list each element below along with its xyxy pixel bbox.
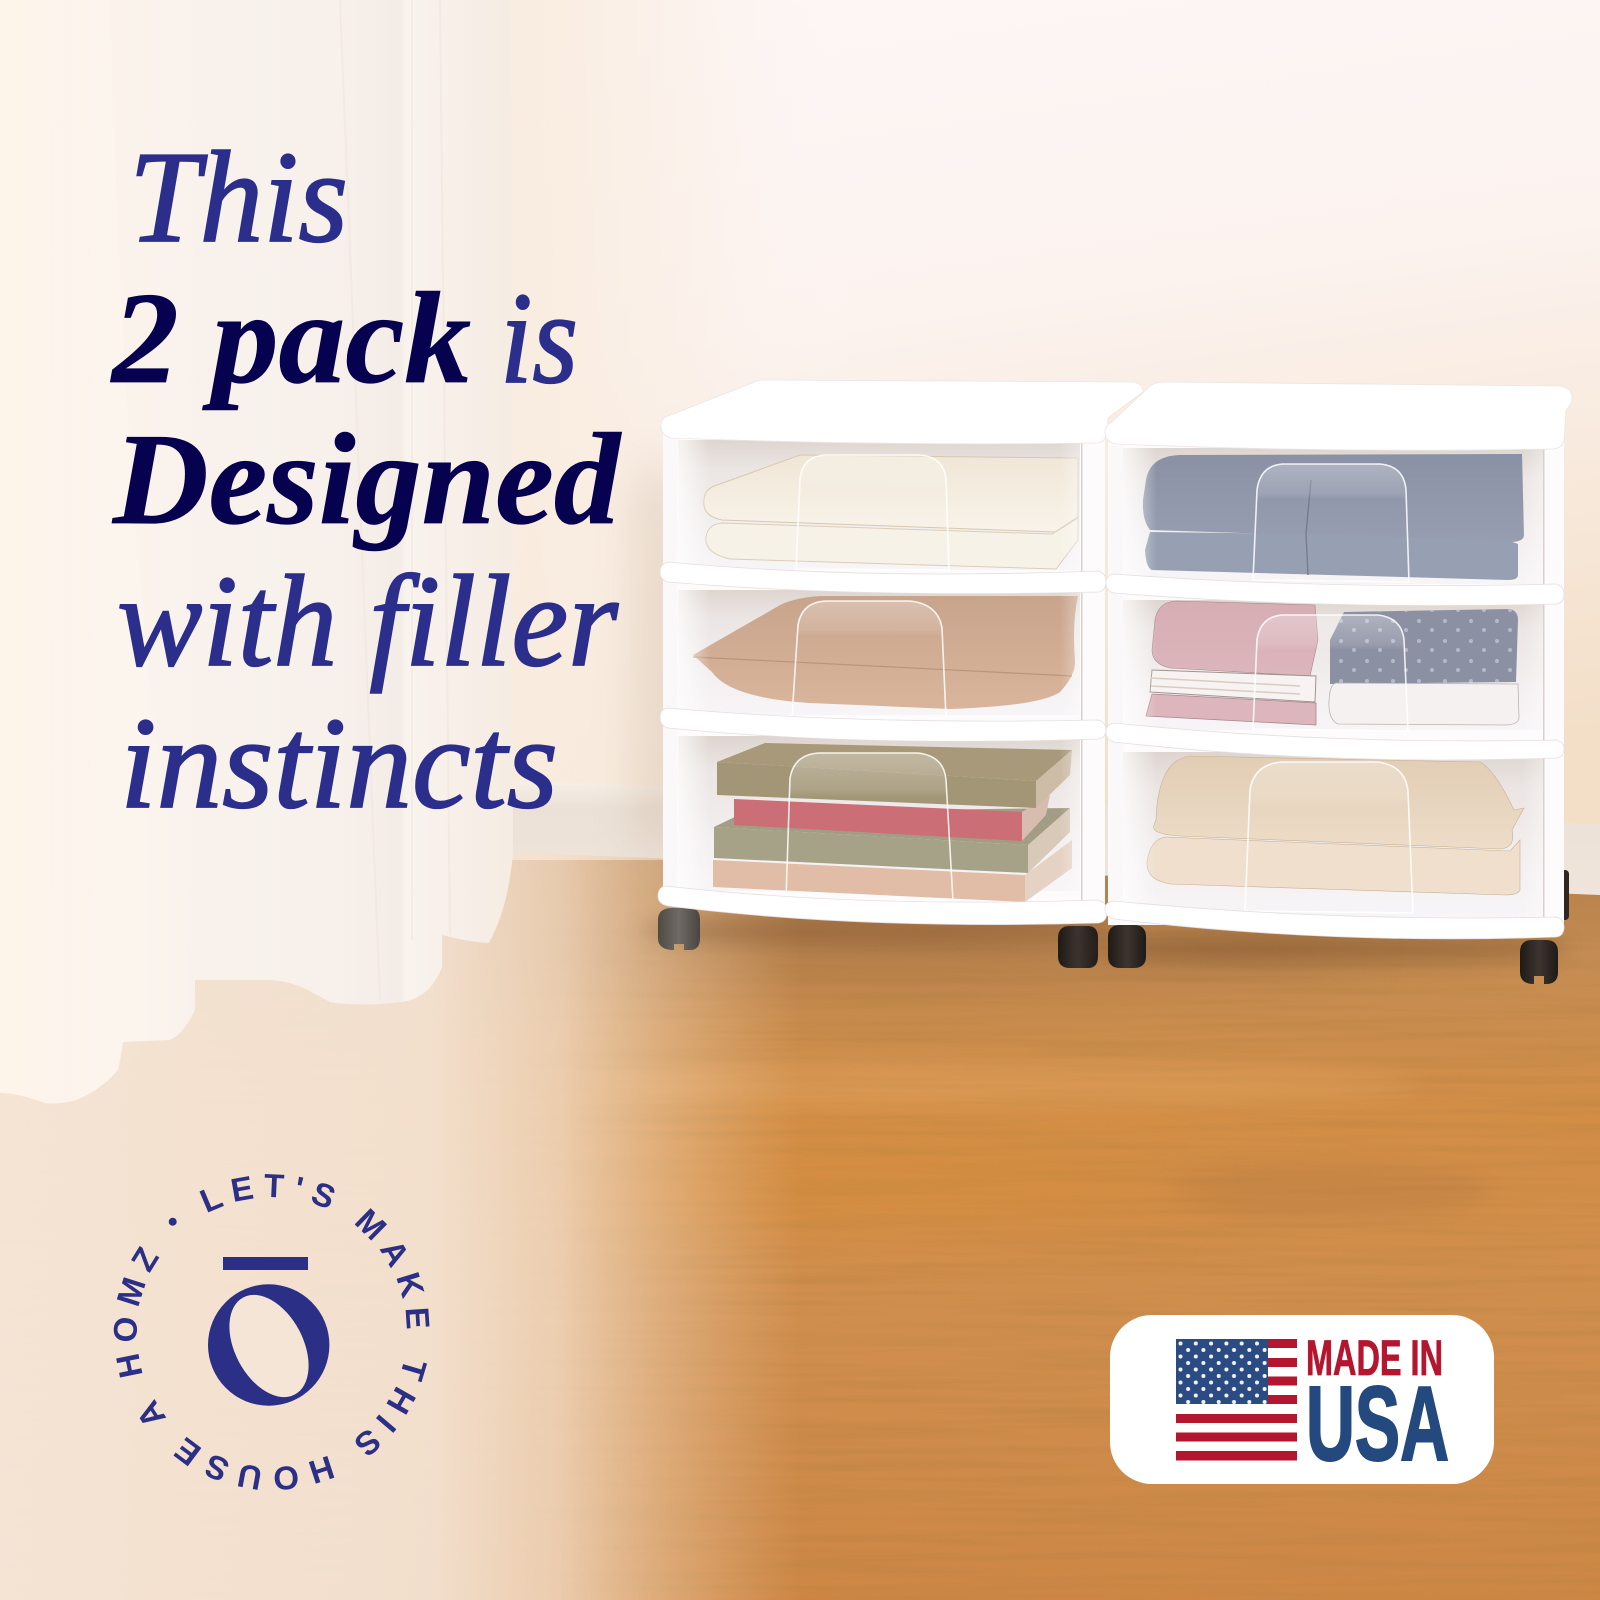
drawer 3: beige folded blankets — [1123, 752, 1543, 917]
soft shadow on wall beside cart — [640, 470, 680, 855]
circular slogan: LET'S MAKE THIS HOUSE A HOMZ — [114, 1174, 430, 1490]
cart frame — [1108, 440, 1564, 925]
pink folded fabric — [1152, 601, 1318, 676]
handle — [786, 753, 953, 901]
handle — [796, 455, 949, 570]
background: baseboard — [500, 780, 1600, 895]
caster wheels: left cart — [658, 908, 1098, 968]
rail 2 — [1106, 723, 1564, 760]
book: sage — [714, 808, 1070, 873]
handle — [1253, 464, 1409, 582]
dotted fabric — [1330, 609, 1518, 684]
drawer 2: tan pillow — [678, 590, 1080, 718]
usa text: USA — [1306, 1365, 1449, 1483]
headline line 2 regular: is — [500, 266, 578, 411]
headline line 1: This — [129, 125, 348, 270]
top panel — [1105, 382, 1572, 450]
drawer 1: blue-grey folded blankets — [1123, 448, 1543, 584]
storage cart: right — [1090, 382, 1572, 984]
top panel — [661, 380, 1143, 444]
pink base fabric — [1146, 694, 1316, 725]
rail 2 — [660, 708, 1106, 741]
background: wood floor — [0, 848, 1600, 1600]
overline bar — [223, 1257, 308, 1270]
handle — [1245, 762, 1413, 913]
badge: made in usa — [1110, 1315, 1494, 1484]
drawer 3: stacked books — [678, 736, 1080, 902]
striped folded fabric — [1150, 670, 1316, 702]
bottom rail — [1105, 901, 1564, 939]
logo: circular brand seal — [114, 1174, 430, 1490]
caster wheels: right cart — [1108, 870, 1569, 984]
cart frame — [663, 430, 1105, 905]
headline — [110, 125, 623, 836]
curtain — [0, 0, 513, 1104]
rail 1 — [1106, 574, 1564, 606]
book: peach — [713, 840, 1072, 902]
separator dot — [169, 1218, 177, 1226]
background: wall — [0, 0, 1600, 900]
side posts — [663, 438, 1105, 908]
handle — [1253, 615, 1408, 731]
handle — [792, 601, 946, 718]
drawer 1: folded cream sheets — [678, 440, 1080, 570]
rail 1 — [660, 562, 1106, 594]
side posts — [1109, 446, 1563, 926]
storage cart: left — [640, 380, 1143, 968]
white folded fabric — [1329, 683, 1519, 725]
american flag icon — [1176, 1339, 1297, 1460]
headline line 4: with filler — [117, 549, 619, 694]
book: olive — [717, 743, 1072, 808]
made in text: MADE IN — [1306, 1330, 1443, 1386]
bottom rail — [658, 886, 1107, 925]
headline line 3 bold: Designed — [112, 407, 623, 552]
headline line 2 bold: 2 pack — [110, 266, 471, 411]
headline line 5: instincts — [120, 691, 558, 836]
letter o mark — [208, 1281, 329, 1411]
book: red — [734, 795, 1050, 841]
drawer 2: pink and dotted textiles — [1123, 600, 1543, 731]
